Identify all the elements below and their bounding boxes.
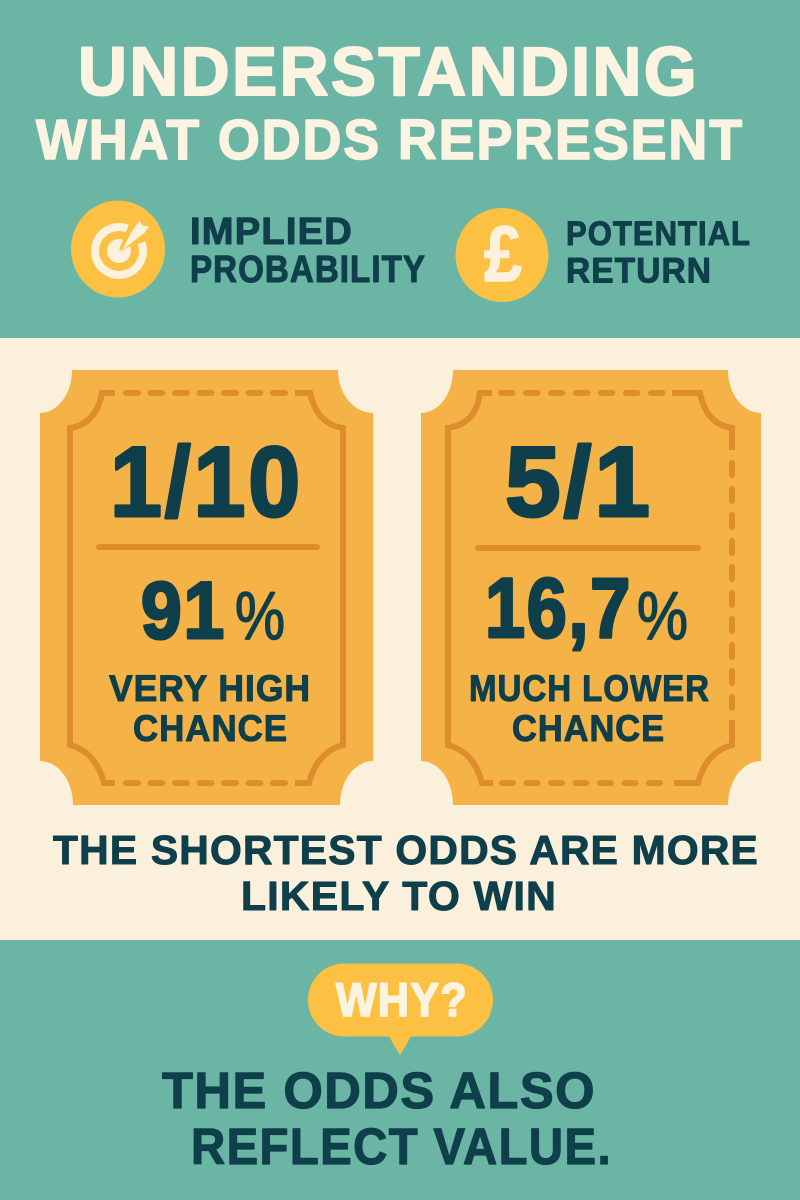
probability 91%: 91	[141, 566, 226, 656]
statement: odds reflect value: THE ODDS ALSO	[162, 1062, 596, 1119]
label: potential return: RETURN	[566, 252, 712, 290]
label: implied probability: IMPLIED	[190, 211, 353, 253]
label: implied probability	[190, 211, 426, 291]
icon: target with arrow	[71, 200, 165, 298]
speech bubble: why: WHY?	[336, 973, 468, 1026]
statement: odds reflect value	[162, 1062, 612, 1175]
caption: very high chance: CHANCE	[133, 708, 288, 749]
speech bubble: why	[308, 964, 493, 1055]
odds 1/10: 1/10	[110, 426, 303, 537]
probability 16,7%: %	[637, 578, 688, 654]
ticket divider	[96, 544, 320, 550]
ticket divider	[475, 545, 701, 551]
caption: much lower chance	[469, 668, 710, 749]
panel: ticket 1/10	[40, 370, 373, 805]
label: potential return: POTENTIAL	[566, 215, 751, 253]
probability 16,7%: 16,7	[485, 561, 632, 655]
statement: odds reflect value: REFLECT VALUE.	[191, 1118, 612, 1175]
ticket inner border	[70, 393, 343, 783]
title line 1: UNDERSTANDING	[78, 33, 699, 110]
caption: much lower chance: CHANCE	[512, 708, 665, 749]
panel: footer	[0, 940, 800, 1200]
probability 91%	[141, 566, 285, 656]
statement: shortest odds: LIKELY TO WIN	[241, 873, 557, 919]
statement: shortest odds	[53, 827, 759, 919]
caption: very high chance	[109, 668, 311, 749]
panel: header	[0, 0, 800, 338]
caption: very high chance: VERY HIGH	[109, 668, 311, 709]
panel: ticket 5/1	[421, 370, 761, 805]
statement: shortest odds: THE SHORTEST ODDS ARE MORE	[53, 827, 759, 873]
caption: much lower chance: MUCH LOWER	[469, 668, 710, 709]
icon: pound coin	[456, 208, 548, 302]
ticket inner border	[448, 393, 732, 783]
probability 91%: %	[235, 578, 285, 654]
odds 5/1: 5/1	[505, 426, 653, 537]
icon: pound coin: £	[484, 209, 522, 298]
title line 2: WHAT ODDS REPRESENT	[36, 108, 744, 172]
label: implied probability: PROBABILITY	[190, 249, 426, 291]
label: potential return	[566, 215, 751, 290]
